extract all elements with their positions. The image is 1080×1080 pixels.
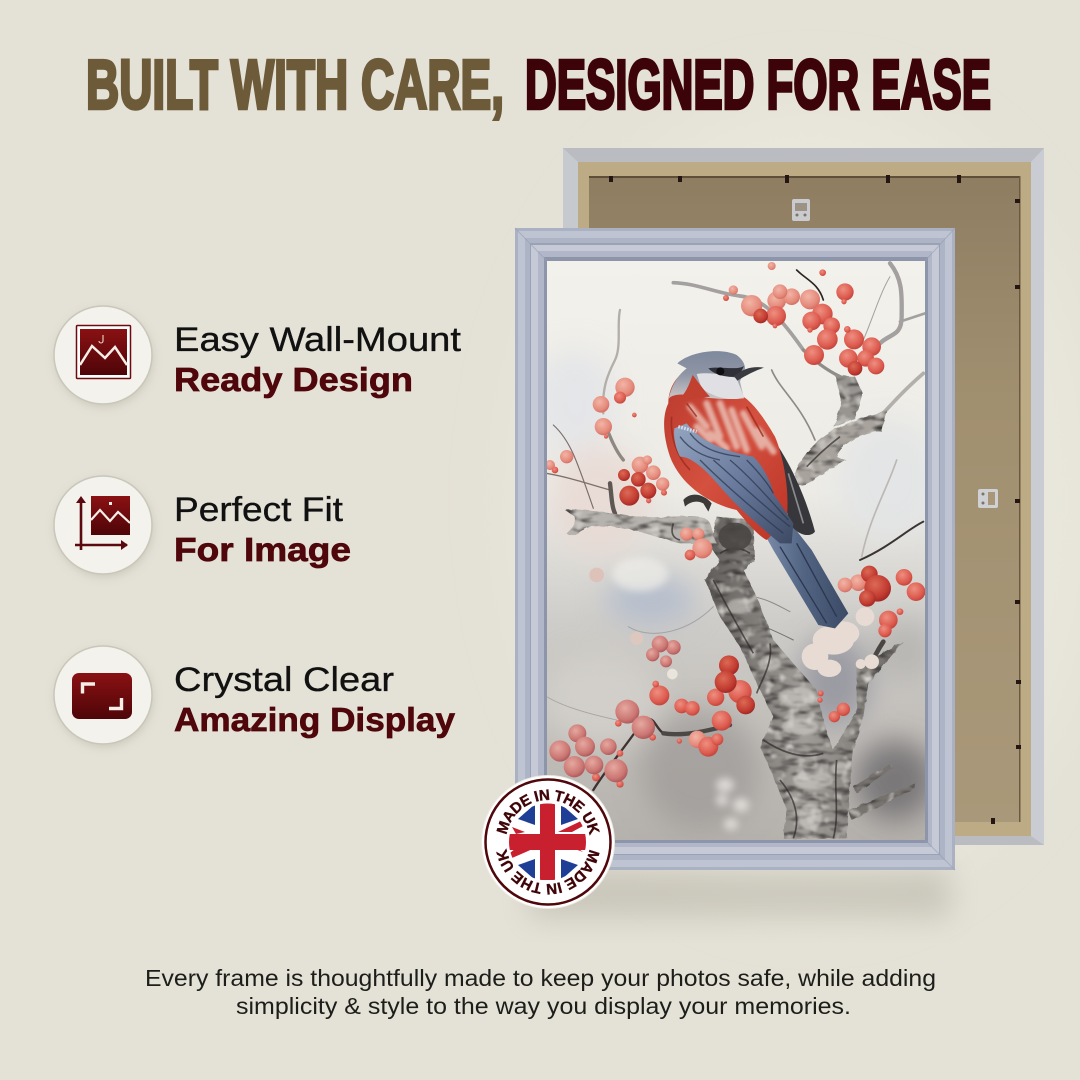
staples xyxy=(609,175,1021,824)
made in the uk badge xyxy=(481,775,615,909)
trunk xyxy=(565,375,915,838)
footer text xyxy=(145,965,936,1019)
bird xyxy=(664,351,848,628)
hanger side xyxy=(978,489,998,508)
icon: display screen xyxy=(54,646,152,746)
label: crystal clear xyxy=(174,661,456,738)
icon: wall-mount picture xyxy=(54,306,152,406)
label: easy wall-mount: Easy Wall-Mount xyxy=(174,321,462,359)
made in the uk badge: MADE IN THE UK xyxy=(496,789,600,836)
eye xyxy=(716,367,724,375)
front frame xyxy=(515,228,955,870)
artwork xyxy=(535,261,940,840)
footer text: simplicity & style to the way you display your memories. xyxy=(236,993,851,1019)
front frame shadow xyxy=(530,868,950,918)
label: easy wall-mount xyxy=(174,321,462,398)
icon: image with dimension arrows xyxy=(54,476,152,576)
title: BUILT WITH CARE, xyxy=(86,46,504,124)
feature: easy wall-mount xyxy=(54,306,462,406)
body xyxy=(664,375,788,540)
beak xyxy=(734,367,764,381)
blossoms xyxy=(589,568,879,679)
painting: paper wash xyxy=(547,261,925,840)
berries xyxy=(545,262,925,788)
hanger top xyxy=(792,199,810,221)
made in the uk badge: MADE IN THE UK xyxy=(496,848,600,895)
label: easy wall-mount: Ready Design xyxy=(174,361,413,398)
label: perfect fit: For Image xyxy=(174,531,351,568)
footer text: Every frame is thoughtfully made to keep your photos safe, while adding xyxy=(145,965,936,991)
claws xyxy=(683,495,712,512)
union flag xyxy=(509,804,586,880)
dark primaries xyxy=(778,447,815,535)
back of frame xyxy=(563,148,1044,845)
label: crystal clear: Crystal Clear xyxy=(174,661,394,699)
tail xyxy=(768,528,848,628)
head xyxy=(668,351,745,400)
painting: branches, bird and berries xyxy=(545,262,925,838)
label: crystal clear: Amazing Display xyxy=(174,701,456,738)
branches xyxy=(547,263,925,790)
feature: perfect fit xyxy=(54,476,351,576)
wing xyxy=(674,423,793,543)
label: perfect fit: Perfect Fit xyxy=(174,491,344,529)
feature: crystal clear xyxy=(54,646,456,746)
label: perfect fit xyxy=(174,491,351,568)
chest streaks xyxy=(690,403,773,452)
